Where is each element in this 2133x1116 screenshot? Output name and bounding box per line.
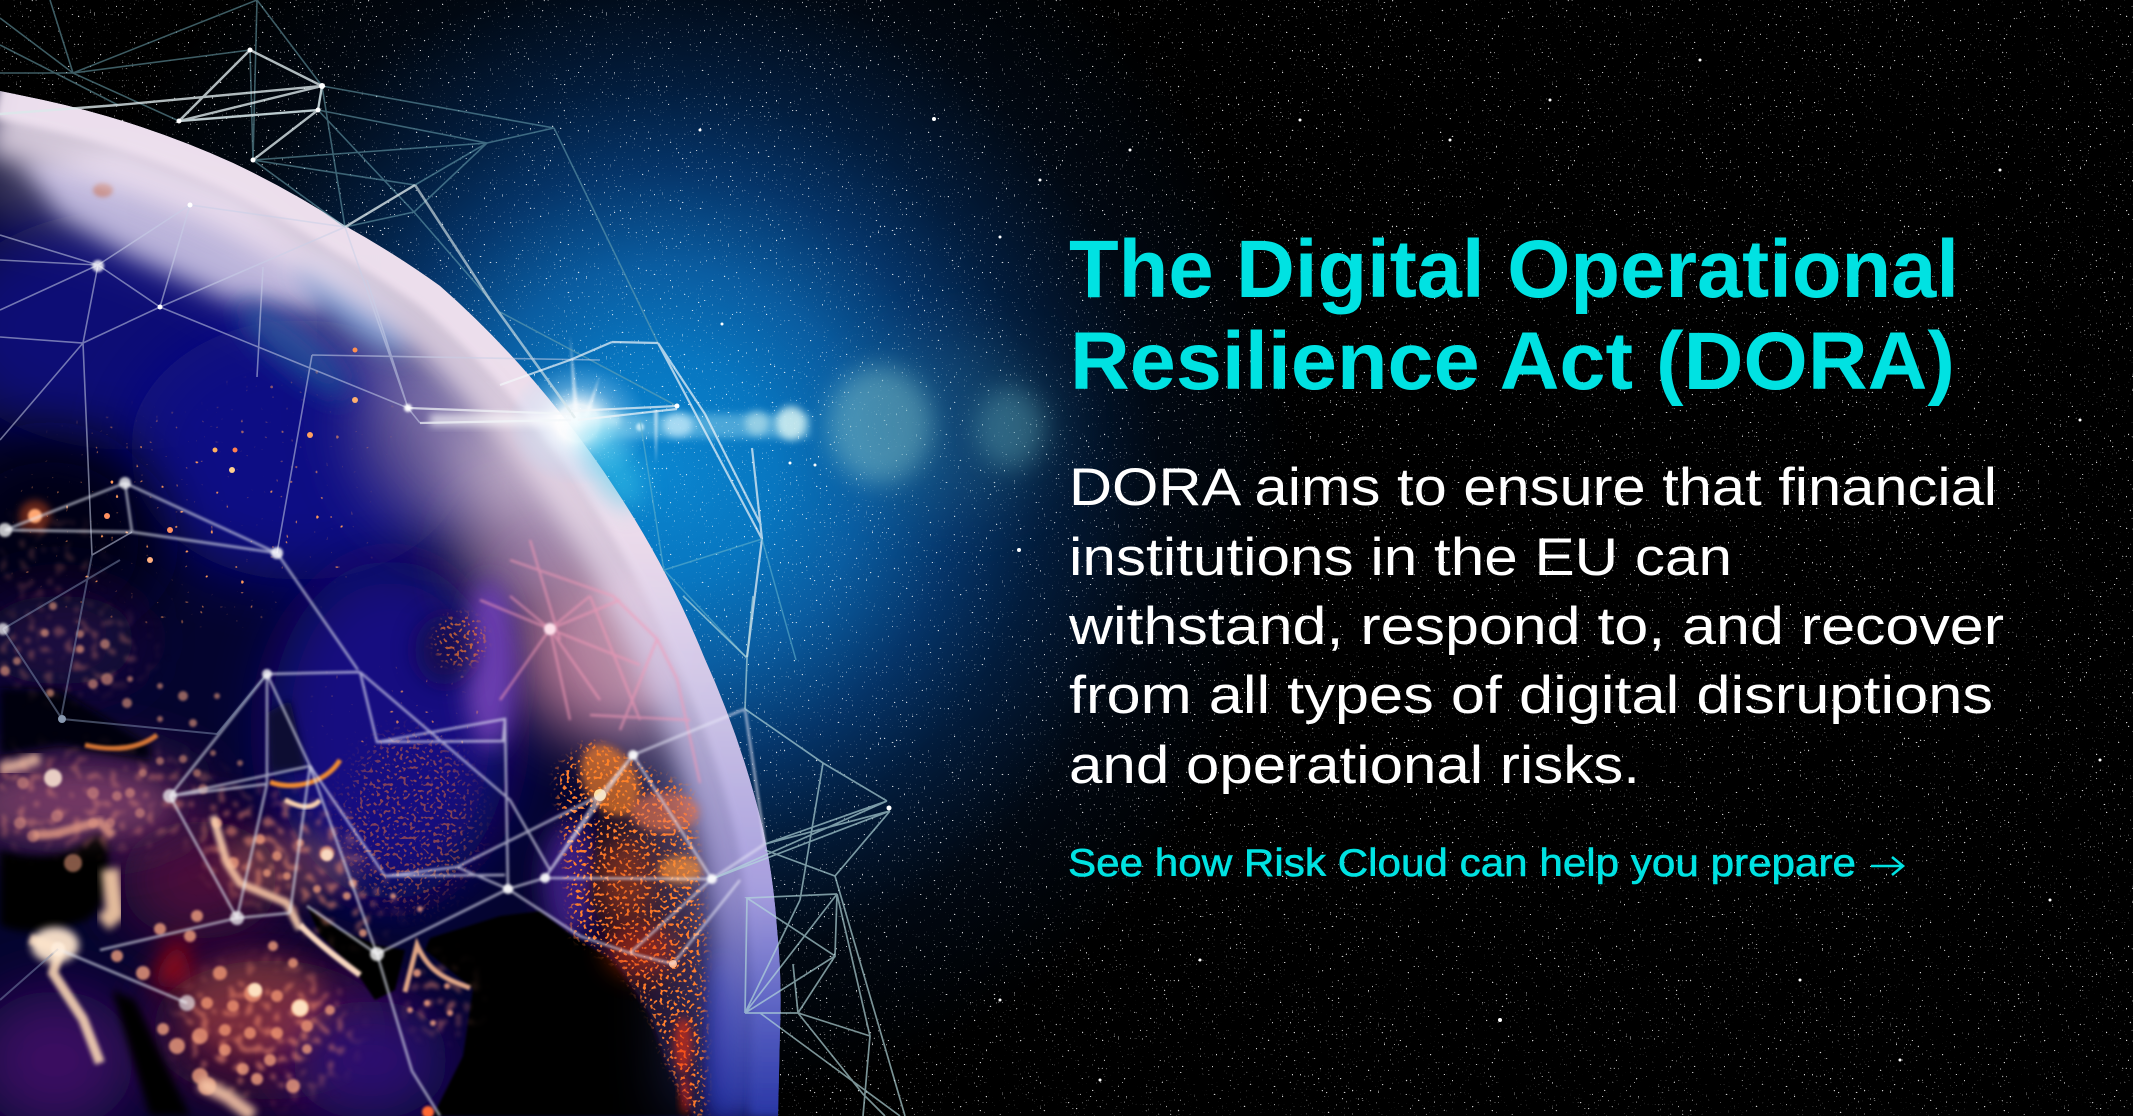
network: lines over globe <box>0 205 600 555</box>
body text: withstand, respond to, and recover <box>1068 597 2004 656</box>
body text: institutions in the EU can <box>1069 528 1732 587</box>
network: dim lines at far left <box>0 555 267 1000</box>
network: central web <box>267 672 765 964</box>
body text <box>1068 458 2004 795</box>
bokeh city lights texture <box>0 518 480 1106</box>
network: bright lines at flare <box>408 342 762 657</box>
body text: DORA aims to ensure that financial <box>1069 458 1997 517</box>
sparse city lights <box>2 356 478 784</box>
body text: and operational risks. <box>1069 736 1640 795</box>
dark seas <box>0 688 703 1116</box>
title <box>1069 224 1959 407</box>
bokeh city light circles <box>0 602 453 1095</box>
network nodes <box>0 48 892 1011</box>
network: node cluster left of globe <box>5 483 440 1116</box>
body text: from all types of digital disruptions <box>1069 666 1993 725</box>
network: lines outside limb lower right <box>683 596 905 1116</box>
title: The Digital Operational <box>1069 224 1959 315</box>
atmosphere rim <box>0 91 781 1116</box>
city light glow: India <box>568 734 702 1115</box>
network: space lines upper left <box>0 0 677 406</box>
network: bright web upper left <box>0 50 575 418</box>
pink network over Asia <box>480 540 700 783</box>
network: teal lines at limb <box>640 420 796 660</box>
lens flare <box>430 335 1060 518</box>
fine orange city lights <box>330 608 712 1116</box>
icon: arrow <box>1871 857 1903 875</box>
ocean and land tones <box>0 150 738 1116</box>
earth globe <box>0 91 781 1116</box>
call to action link: See how Risk Cloud can help you prepare <box>1068 842 1856 885</box>
city light glow: Europe, Middle East and Africa <box>0 348 470 1116</box>
title: Resilience Act (DORA) <box>1070 316 1955 407</box>
